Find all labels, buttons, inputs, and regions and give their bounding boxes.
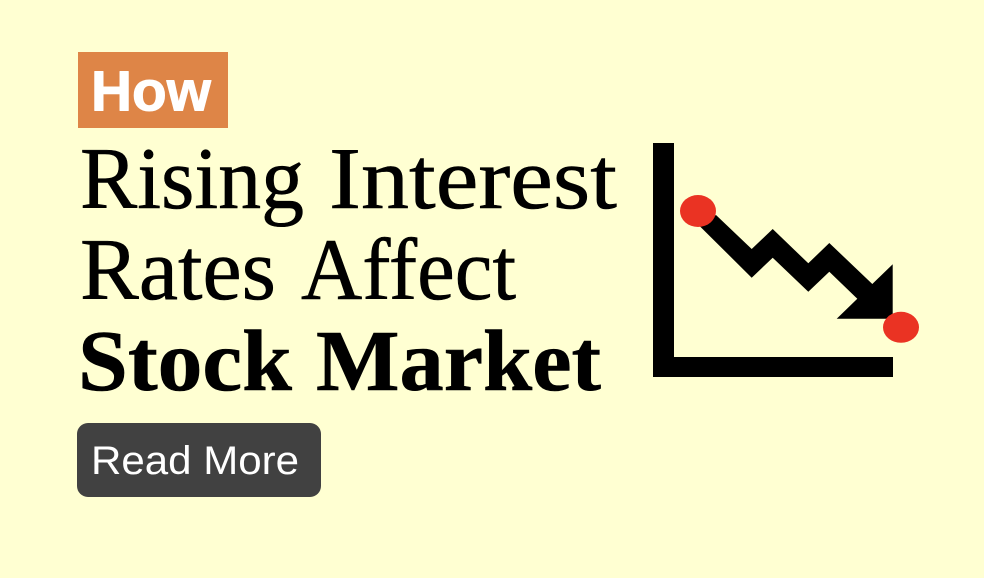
title line 2: Rates <box>80 222 276 319</box>
title line 1: Rising <box>80 131 304 228</box>
title line 3 <box>78 312 601 409</box>
title line 2 <box>80 222 516 319</box>
start point <box>680 195 716 227</box>
title line 1: Interest <box>329 131 617 228</box>
button: Read More: Read More <box>91 439 299 483</box>
badge: How: How <box>91 60 212 124</box>
icon: falling chart <box>653 143 919 377</box>
button: Read More <box>77 423 321 497</box>
title <box>78 131 617 409</box>
chart axes <box>653 143 893 377</box>
title line 2: Affect <box>301 222 516 319</box>
badge: How <box>78 52 228 128</box>
title line 3: Market <box>316 312 601 409</box>
title line 1 <box>80 131 617 228</box>
title line 3: Stock <box>78 312 293 409</box>
falling zigzag arrow <box>699 215 893 319</box>
end point <box>883 312 919 343</box>
